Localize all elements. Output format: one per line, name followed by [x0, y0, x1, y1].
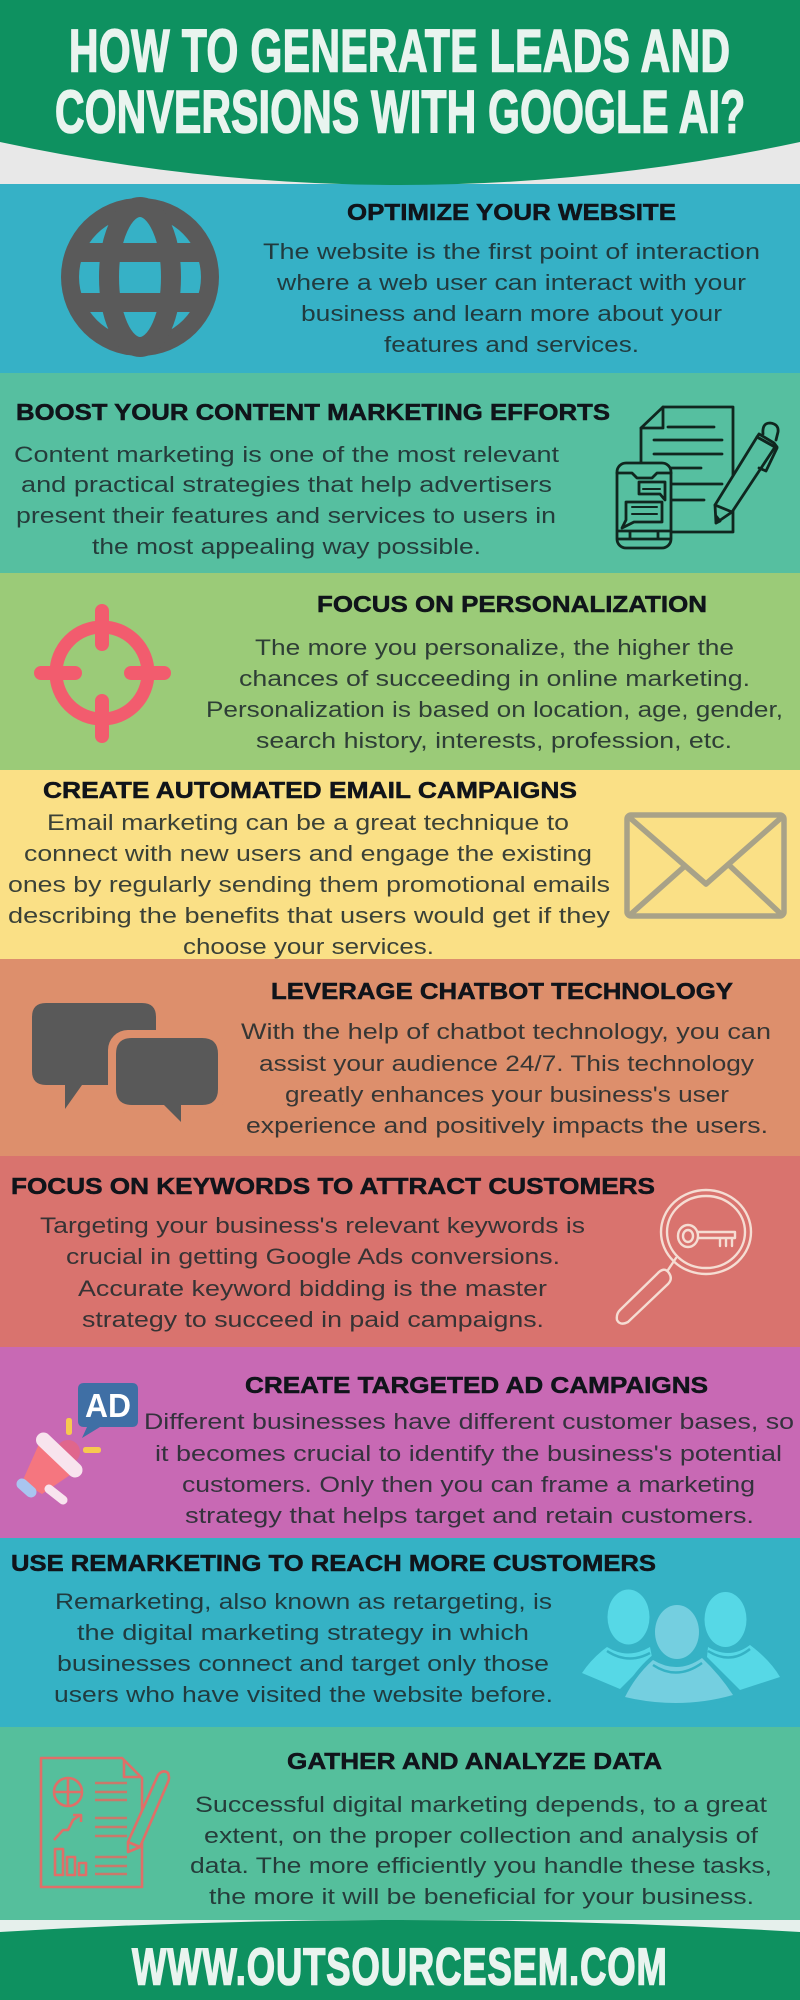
text block: targeted ads body: Different businesses have different customer bases, so — [144, 1409, 794, 1434]
icon: magnifier with key — [617, 1190, 751, 1324]
text block: email body: describing the benefits that users would get if they — [8, 903, 611, 928]
heading: gather data: GATHER AND ANALYZE DATA — [287, 1748, 662, 1774]
text block: website body: business and learn more about your — [301, 301, 723, 326]
text block: content marketing body — [14, 442, 560, 559]
heading: personalization: FOCUS ON PERSONALIZATION — [317, 591, 707, 617]
text block: data body: the more it will be beneficial for your business. — [209, 1884, 754, 1909]
heading: optimize your website: OPTIMIZE YOUR WEBSITE — [347, 199, 676, 225]
panel: gather and analyze data — [0, 1727, 800, 1920]
heading: content marketing: BOOST YOUR CONTENT MARKETING EFFORTS — [16, 399, 610, 425]
text block: remarketing body — [54, 1589, 553, 1707]
text block: remarketing body: businesses connect and target only those — [57, 1651, 549, 1676]
panel: chatbot technology — [0, 959, 800, 1156]
heading: chatbot: LEVERAGE CHATBOT TECHNOLOGY — [271, 978, 733, 1004]
text block: chatbot body: With the help of chatbot technology, you can — [241, 1019, 771, 1044]
text block: chatbot body — [241, 1019, 771, 1138]
text block: website body: The website is the first point of interaction — [263, 239, 760, 264]
text block: website body — [263, 239, 760, 357]
text block: remarketing body: users who have visited the website before. — [54, 1682, 553, 1707]
heading: email campaigns: CREATE AUTOMATED EMAIL CAMPAIGNS — [43, 777, 577, 803]
panel: targeted ad campaigns — [0, 1347, 800, 1538]
text block: email body — [8, 810, 611, 959]
icon: chat bubbles — [32, 1003, 226, 1122]
panel: automated email campaigns — [0, 770, 800, 959]
text block: data body: extent, on the proper collection and analysis of — [204, 1823, 759, 1848]
header banner — [0, 0, 800, 185]
text block: personalization body: search history, interests, profession, etc. — [256, 728, 732, 753]
title: HOW TO GENERATE LEADS AND — [69, 18, 730, 84]
text block: personalization body: The more you personalize, the higher the — [255, 635, 734, 660]
text block: chatbot body: greatly enhances your business's user — [285, 1082, 730, 1107]
icon: envelope — [627, 815, 784, 916]
text block: content marketing body: Content marketing is one of the most relevant — [14, 442, 560, 467]
text block: personalization body — [206, 635, 783, 753]
text block: data body: Successful digital marketing depends, to a great — [195, 1792, 768, 1817]
text block: remarketing body: Remarketing, also known as retargeting, is — [55, 1589, 552, 1614]
text block: targeted ads body: it becomes crucial to identify the business's potential — [155, 1441, 782, 1466]
text block: keywords body: Targeting your business's relevant keywords is — [40, 1213, 585, 1238]
icon: data report and pencil — [41, 1758, 169, 1887]
heading: remarketing: USE REMARKETING TO REACH MORE CUSTOMERS — [11, 1550, 656, 1576]
text block: email body: Email marketing can be a great technique to — [47, 810, 569, 835]
footer url: WWW.OUTSOURCESEM.COM — [132, 1937, 667, 1996]
icon: megaphone with AD bubble: AD — [85, 1387, 131, 1424]
text block: personalization body: chances of succeeding in online marketing. — [239, 666, 750, 691]
text block: chatbot body: experience and positively impacts the users. — [246, 1113, 768, 1138]
text block: targeted ads body — [144, 1409, 794, 1528]
text block: data body — [190, 1792, 772, 1909]
text block: website body: features and services. — [384, 332, 639, 357]
heading: keywords: FOCUS ON KEYWORDS TO ATTRACT CUSTOMERS — [11, 1173, 655, 1199]
text block: data body: data. The more efficiently you handle these tasks, — [190, 1853, 772, 1878]
text block: keywords body: crucial in getting Google Ads conversions. — [66, 1244, 560, 1269]
text block: personalization body: Personalization is based on location, age, gender, — [206, 697, 783, 722]
icon: crosshair target — [41, 611, 164, 736]
text block: chatbot body: assist your audience 24/7. This technology — [259, 1051, 755, 1076]
panel: content marketing — [0, 373, 800, 573]
text block: content marketing body: the most appealing way possible. — [92, 534, 481, 559]
text block: targeted ads body: strategy that helps target and retain customers. — [185, 1503, 754, 1528]
title: CONVERSIONS WITH GOOGLE AI? — [55, 79, 745, 145]
panel: personalization — [0, 573, 800, 770]
heading: targeted ad campaigns: CREATE TARGETED AD CAMPAIGNS — [245, 1372, 708, 1398]
icon: globe — [61, 198, 219, 356]
icon: group of people — [582, 1590, 780, 1703]
text block: email body: connect with new users and engage the existing — [24, 841, 592, 866]
text block: keywords body: Accurate keyword bidding is the master — [78, 1276, 548, 1301]
text block: keywords body — [40, 1213, 585, 1332]
text block: keywords body: strategy to succeed in paid campaigns. — [82, 1307, 544, 1332]
icon: megaphone with AD bubble — [22, 1383, 138, 1500]
panel: keywords — [0, 1156, 800, 1347]
footer banner — [0, 1920, 800, 2000]
text block: content marketing body: present their features and services to users in — [16, 503, 556, 528]
text block: website body: where a web user can interact with your — [276, 270, 747, 295]
icon: document, phone and pen — [617, 407, 778, 548]
text block: remarketing body: the digital marketing strategy in which — [77, 1620, 529, 1645]
title — [55, 18, 745, 145]
text block: email body: choose your services. — [183, 934, 434, 959]
panel: optimize your website — [0, 142, 800, 373]
text block: targeted ads body: customers. Only then you can frame a marketing — [182, 1472, 755, 1497]
panel: remarketing — [0, 1538, 800, 1727]
text block: email body: ones by regularly sending them promotional emails — [8, 872, 610, 897]
text block: content marketing body: and practical strategies that help advertisers — [21, 472, 552, 497]
